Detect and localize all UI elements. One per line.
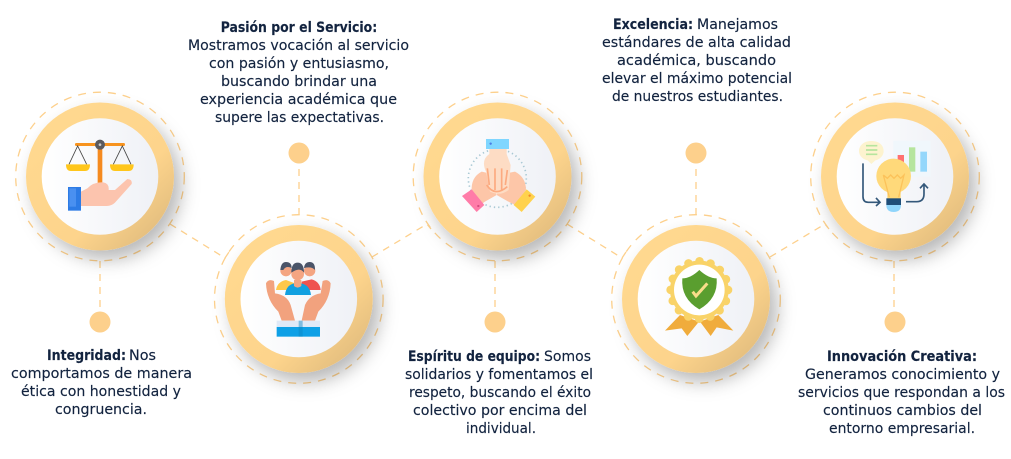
icon: joined hands — [462, 139, 535, 212]
text: espiritu de equipo: solidarios y fomentamos el — [405, 366, 593, 383]
text: espiritu de equipo: respeto, buscando el éxito — [409, 384, 591, 401]
text: innovacion creativa: continuos cambios del — [823, 402, 982, 419]
text: pasion por el servicio: con pasión y entusiasmo, — [209, 55, 389, 72]
text: integridad: ética con honestidad y — [21, 383, 181, 400]
text: espiritu de equipo: individual. — [466, 420, 536, 437]
connector dots — [90, 142, 906, 332]
text: innovacion creativa: Generamos conocimiento y — [805, 366, 1000, 383]
text: innovacion creativa: Innovación Creativa: — [827, 349, 977, 365]
connector lines — [100, 163, 894, 312]
text: excelencia: académica, buscando — [617, 52, 776, 69]
text: pasion por el servicio: Mostramos vocación al servicio — [188, 37, 409, 54]
icon: medal with shield — [665, 261, 733, 336]
text: integridad: Nos — [129, 347, 156, 364]
text: pasion por el servicio: Pasión por el Servicio: — [221, 20, 377, 36]
badge: espiritu de equipo — [413, 92, 582, 261]
icon: scales on hand — [66, 140, 134, 211]
text: espiritu de equipo: Somos — [544, 348, 591, 365]
text: integridad: comportamos de manera — [11, 365, 192, 382]
text: pasion por el servicio: buscando brindar una — [221, 73, 377, 90]
icon: light bulb with chart — [859, 141, 931, 212]
badge: integridad — [16, 92, 184, 261]
text: excelencia: elevar el máximo potencial — [602, 70, 792, 87]
text: integridad: congruencia. — [55, 401, 147, 418]
text: innovacion creativa: entorno empresarial. — [829, 420, 975, 437]
badge: innovacion creativa — [811, 92, 979, 261]
text: pasion por el servicio: supere las expectativas. — [215, 109, 384, 126]
text: excelencia: Excelencia: — [613, 17, 693, 33]
badge: excelencia — [612, 215, 780, 383]
text: excelencia — [602, 16, 792, 105]
text: innovacion creativa: servicios que respondan a los — [798, 384, 1005, 401]
text: innovacion creativa — [798, 349, 1005, 437]
text: integridad — [11, 347, 192, 418]
text: excelencia: Manejamos — [697, 16, 778, 33]
icon: people in hands — [266, 262, 331, 337]
text: espiritu de equipo: colectivo por encima del — [413, 402, 587, 419]
text: integridad: Integridad: — [47, 348, 126, 364]
badge: pasion por el servicio — [214, 215, 383, 383]
text: espiritu de equipo: Espíritu de equipo: — [408, 349, 540, 365]
text: excelencia: estándares de alta calidad — [602, 34, 791, 51]
text: excelencia: de nuestros estudiantes. — [612, 88, 783, 105]
text: pasion por el servicio: experiencia académica que — [200, 91, 397, 108]
text: pasion por el servicio — [188, 20, 409, 126]
text: espiritu de equipo — [405, 348, 593, 437]
